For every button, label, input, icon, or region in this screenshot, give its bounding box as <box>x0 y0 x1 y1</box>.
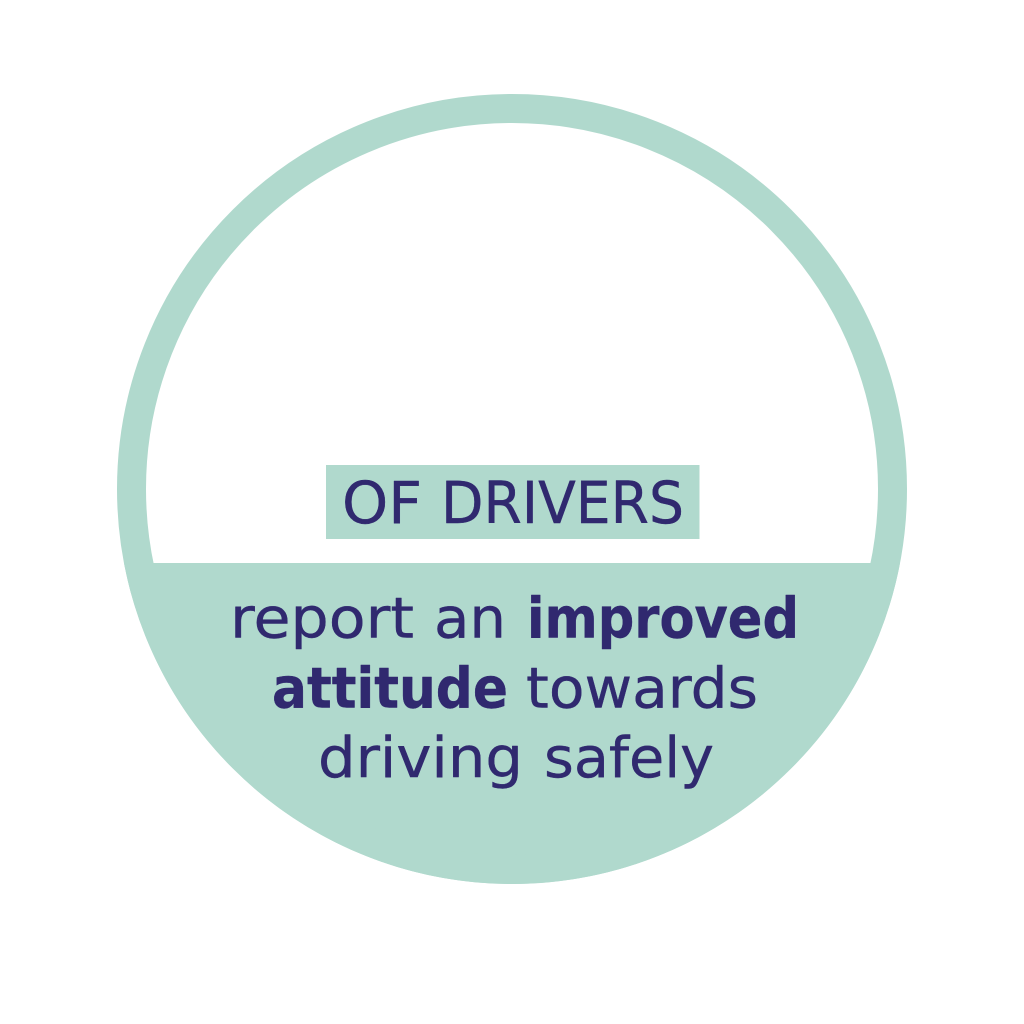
description text <box>230 586 799 791</box>
description text: an <box>434 586 506 652</box>
label box: of drivers: OF <box>342 469 422 537</box>
description text: towards <box>526 656 758 722</box>
description text: report <box>230 586 414 652</box>
description text: improved <box>527 586 799 652</box>
label box: of drivers <box>326 465 700 539</box>
description text: attitude <box>272 656 508 722</box>
circle ring <box>132 108 892 870</box>
description text: driving <box>318 726 523 791</box>
infographic <box>117 94 907 884</box>
description text: safely <box>544 726 714 791</box>
filled lower segment of circle <box>100 563 924 893</box>
label box: of drivers: DRIVERS <box>441 469 684 537</box>
